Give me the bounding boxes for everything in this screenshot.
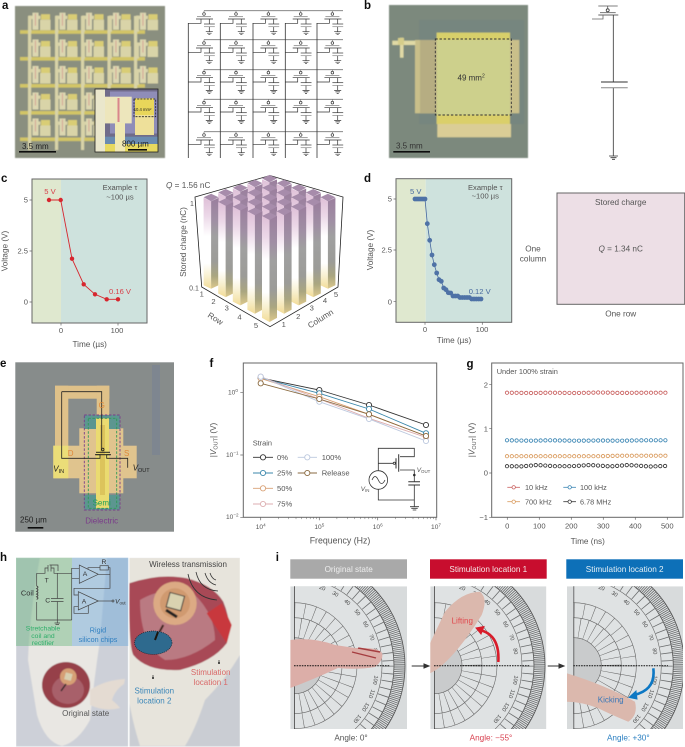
scatter chart: voltage vs time: Voltage (V) [366, 229, 375, 270]
circuit overlay: A [83, 571, 88, 578]
terminal labels: OUT [138, 468, 150, 474]
inset circuit: V [417, 467, 422, 474]
line chart: output vs frequency: Frequency (Hz) [310, 536, 370, 546]
3D bar chart: stored charge: Row [206, 311, 225, 327]
legend: strain: 100% [322, 453, 341, 462]
photo: 5x5 capacitor array [15, 6, 165, 158]
3D bar chart: stored charge: 1 [200, 290, 204, 298]
overlay: stretchable coil and rectifier region [16, 558, 72, 646]
scatter chart: voltage vs time: Time (µs) [437, 336, 471, 345]
line chart: voltage vs time: Time (µs) [72, 340, 107, 349]
label 49 mm2: 2 [482, 74, 485, 80]
line chart: output vs frequency: 10 [314, 524, 322, 531]
header: stimulation location 1: Stimulation location 1 [449, 565, 528, 574]
3D bar chart: stored charge: 5 [334, 290, 338, 299]
line chart: voltage vs time: 100 [111, 326, 123, 335]
line chart: output vs frequency: 10 [373, 524, 380, 531]
panel letter h: h [0, 552, 7, 564]
3D bar chart: stored charge: Column [306, 307, 335, 330]
line chart: output vs time under strain [468, 363, 683, 546]
line chart: voltage vs time: Voltage (V) [0, 230, 10, 271]
inset circuit: OUT [421, 469, 431, 474]
3D bar chart: stored charge: 3 [225, 304, 229, 312]
terminal labels: V [133, 464, 139, 472]
inset circuit: V [361, 486, 366, 493]
line chart: output vs time under strain: 0 [484, 469, 488, 478]
3D bar chart: stored charge: 1 [282, 320, 286, 329]
circuit overlay: R [102, 559, 107, 566]
stimulation location 2 patch [135, 631, 172, 654]
legend: frequency: 10 kHz [525, 483, 548, 492]
labels: rectifier [32, 640, 55, 647]
inset: single cell magnified [95, 89, 158, 152]
scatter chart: voltage vs time: 5 [388, 195, 392, 204]
circuit overlay [21, 559, 126, 624]
labels: location 1 [194, 678, 228, 687]
3D bar chart: stored charge: 2 [211, 297, 216, 306]
panel letter d: d [364, 173, 371, 185]
line chart: output vs time under strain: |V [468, 450, 476, 457]
schematic: 5x5 array circuit [188, 11, 343, 158]
scale bar 3.5 mm [393, 142, 430, 153]
stored charge map: Stored charge [595, 198, 647, 207]
photo: rat during stimulation [129, 558, 240, 747]
circuit overlay: Coil [21, 588, 34, 598]
line chart: voltage vs time: Example τ [103, 183, 137, 192]
line chart: voltage vs time: 2.5 [17, 247, 28, 256]
Q value: Q = 1.56 nC [166, 181, 210, 190]
caption angle 0: Angle: 0° [334, 734, 368, 742]
scatter chart: voltage vs time: 5 V [410, 187, 422, 196]
wire [155, 632, 158, 640]
line chart: output vs time under strain: 200 [565, 522, 578, 530]
photo: large capacitor [389, 5, 528, 158]
panel g [466, 358, 683, 546]
terminal labels: D [68, 449, 74, 458]
arrow [548, 664, 564, 668]
scatter chart: voltage vs time: 0 [388, 297, 392, 306]
line chart: output vs frequency: 10 [431, 524, 438, 531]
header: original state: Original state [325, 565, 373, 574]
inset circuit: IN [365, 488, 369, 493]
inset: single cell magnified: 10.4 mm² [134, 107, 152, 112]
scatter chart: voltage vs time: ~100 µs [472, 192, 499, 200]
line chart: output vs frequency: |V [209, 450, 218, 457]
3D bar chart: stored charge: 3 [310, 304, 314, 312]
line chart: output vs frequency: 4 [263, 522, 266, 528]
scatter chart: voltage vs time: 2.5 [381, 246, 392, 255]
stored charge map: Q = 1.34 nC [599, 244, 643, 254]
panel letter b: b [364, 0, 371, 12]
line chart: output vs frequency: 0 [235, 388, 238, 393]
3D bar chart: stored charge: Stored charge (nC) [179, 207, 188, 277]
label kicking: Kicking [598, 696, 624, 704]
legend: strain: 50% [277, 484, 292, 493]
labels: Wireless transmission [149, 560, 227, 569]
line chart: output vs frequency [209, 363, 441, 546]
labels: Rigid [90, 626, 106, 634]
labels: Original state [62, 709, 110, 718]
arrow [412, 664, 429, 668]
terminal labels: G [99, 401, 105, 410]
3D bar chart: stored charge: 0.1 [189, 286, 199, 292]
scale bar 3.5 mm [19, 142, 56, 153]
header: stimulation location 2 [566, 559, 683, 579]
photo: rat original state [16, 557, 128, 747]
panel letter c: c [1, 173, 8, 185]
line chart: output vs frequency: 7 [438, 522, 441, 528]
panel letter i: i [276, 552, 279, 564]
labels: Stimulation [135, 686, 174, 696]
label lifting: Lifting [452, 616, 473, 626]
panel a [2, 0, 343, 158]
inset circuit [361, 448, 431, 510]
header: original state [290, 559, 407, 579]
circuit overlay: T [45, 578, 49, 584]
line chart: output vs time under strain: Under 100% strain [497, 367, 558, 376]
labels: coil and [31, 633, 55, 640]
label 49 mm2: 49 mm [458, 74, 482, 82]
line chart: output vs time under strain: 300 [597, 522, 610, 530]
panel e [0, 358, 174, 532]
line chart: output vs frequency: 5 [322, 522, 325, 528]
terminal labels [53, 401, 150, 526]
dielectric outline [84, 415, 120, 510]
line chart: voltage vs time: 5 V [44, 187, 57, 196]
3D bar chart: stored charge: 4 [237, 312, 242, 322]
circuit overlay: C [45, 598, 50, 604]
photo: stimulation location 2, kicking [567, 586, 683, 729]
circuit overlay: A [82, 598, 87, 606]
circuit overlay [62, 392, 128, 468]
scale bar 250 um [20, 516, 47, 529]
legend: strain: 75% [277, 500, 292, 509]
photo: stimulation location 1, lifting [430, 586, 546, 729]
wireless waves icon [188, 572, 218, 600]
stored charge map [520, 193, 685, 318]
line chart: output vs time under strain: 400 [629, 522, 642, 530]
legend: strain: Strain [253, 438, 272, 448]
location pointers [152, 660, 220, 679]
line chart: voltage vs time: 0 [59, 326, 63, 335]
panel d [364, 173, 685, 345]
scatter chart: voltage vs time: 100 [476, 325, 488, 334]
legend: strain [253, 438, 350, 509]
stored charge map: column [520, 254, 547, 264]
scale bar 250 um: 250 µm [20, 516, 47, 524]
photo: original state on protractor [290, 586, 407, 729]
labels: location 2 [137, 696, 172, 706]
header: stimulation location 2: Stimulation location 2 [586, 565, 664, 574]
scatter chart: voltage vs time: 0 [423, 325, 427, 334]
semiconductor outline [88, 418, 117, 508]
line chart: output vs time under strain: 1 [484, 424, 488, 434]
line chart: output vs frequency: −1 [233, 450, 239, 456]
dashed capacitor outline [435, 39, 511, 115]
legend: frequency: 6.78 MHz [580, 497, 612, 506]
line chart: output vs frequency: 10 [228, 390, 235, 396]
panel letter e: e [0, 358, 6, 370]
line chart: voltage vs time: 5 [24, 196, 28, 205]
line chart: voltage vs time [0, 179, 147, 349]
3D bar chart: stored charge [166, 175, 343, 330]
3D bar chart: stored charge: 5 [254, 321, 258, 330]
legend: strain: 0% [277, 453, 288, 462]
terminal labels: IN [59, 469, 64, 475]
line chart: output vs time under strain: 100 [533, 522, 546, 530]
3D bar chart: stored charge: 2 [296, 312, 300, 321]
panel b [364, 0, 628, 159]
panel letter f: f [210, 358, 214, 370]
labels: silicon chips [79, 635, 118, 644]
scale bar 800 um: 800 µm [122, 140, 149, 148]
panel f [209, 358, 441, 546]
lifting arrow [476, 626, 498, 662]
line chart: output vs time under strain: OUT [472, 437, 478, 450]
scale bar 3.5 mm: 3.5 mm [396, 142, 423, 150]
circuit overlay: out [120, 601, 126, 606]
panel i [183, 552, 684, 747]
line chart: output vs frequency: 10 [226, 514, 233, 521]
panel letter a: a [2, 0, 9, 12]
scatter chart: voltage vs time [366, 179, 512, 345]
line chart: output vs time under strain: 500 [661, 522, 674, 530]
legend: frequency: 100 kHz [580, 483, 607, 492]
3D bar chart: stored charge: 4 [323, 296, 327, 305]
line chart: output vs frequency: | (V) [209, 422, 218, 438]
overlay: rigid silicon chips region [72, 558, 128, 646]
panel c [0, 173, 343, 349]
labels: Stimulation [191, 668, 230, 677]
terminal labels: Semi [93, 499, 111, 508]
line chart: output vs time under strain: | (V) [468, 422, 476, 438]
kicking arrow [629, 668, 654, 699]
line chart: voltage vs time: ~100 µs [106, 192, 134, 202]
scale bar 3.5 mm: 3.5 mm [22, 142, 49, 151]
stored charge map: One [525, 244, 541, 254]
scatter chart: voltage vs time: Example τ [468, 183, 503, 192]
line chart: output vs frequency: 10 [226, 452, 233, 459]
labels [26, 560, 230, 718]
scatter chart: voltage vs time: 0.12 V [469, 287, 492, 296]
line chart: output vs frequency: 10 [256, 524, 263, 531]
line chart: voltage vs time: 0 [24, 298, 28, 307]
legend: strain: 25% [277, 469, 292, 478]
line chart: output vs time under strain: 2 [484, 380, 488, 390]
photo: stretchable transistor [15, 362, 174, 532]
schematic: single cell circuit [592, 6, 628, 159]
terminal labels: V [53, 464, 59, 474]
line chart: output vs frequency: 6 [380, 522, 383, 528]
panel letter g: g [466, 358, 474, 370]
line chart: output vs frequency: −2 [233, 512, 239, 518]
3D bar chart: stored charge: 1 [190, 201, 194, 208]
legend: frequency: 700 kHz [525, 497, 552, 506]
caption angle -55: Angle: −55° [470, 734, 512, 742]
stored charge map: One row [605, 310, 636, 318]
panel h [0, 552, 240, 747]
line chart: output vs time under strain: Time (ns) [571, 537, 605, 546]
labels: Stretchable [26, 626, 60, 632]
line chart: output vs time under strain: 0 [505, 522, 509, 530]
circuit overlay: V [115, 598, 121, 606]
legend: frequency [507, 483, 612, 506]
header: stimulation location 1 [430, 559, 547, 579]
line chart: voltage vs time: 0.16 V [109, 287, 132, 296]
line chart: output vs frequency: OUT [213, 437, 219, 450]
terminal labels: S [124, 449, 129, 458]
line chart: output vs time under strain: −1 [479, 513, 488, 522]
terminal labels: Dielectric [85, 516, 118, 526]
caption angle +30: Angle: +30° [607, 734, 650, 742]
legend: strain: Release [322, 469, 350, 478]
